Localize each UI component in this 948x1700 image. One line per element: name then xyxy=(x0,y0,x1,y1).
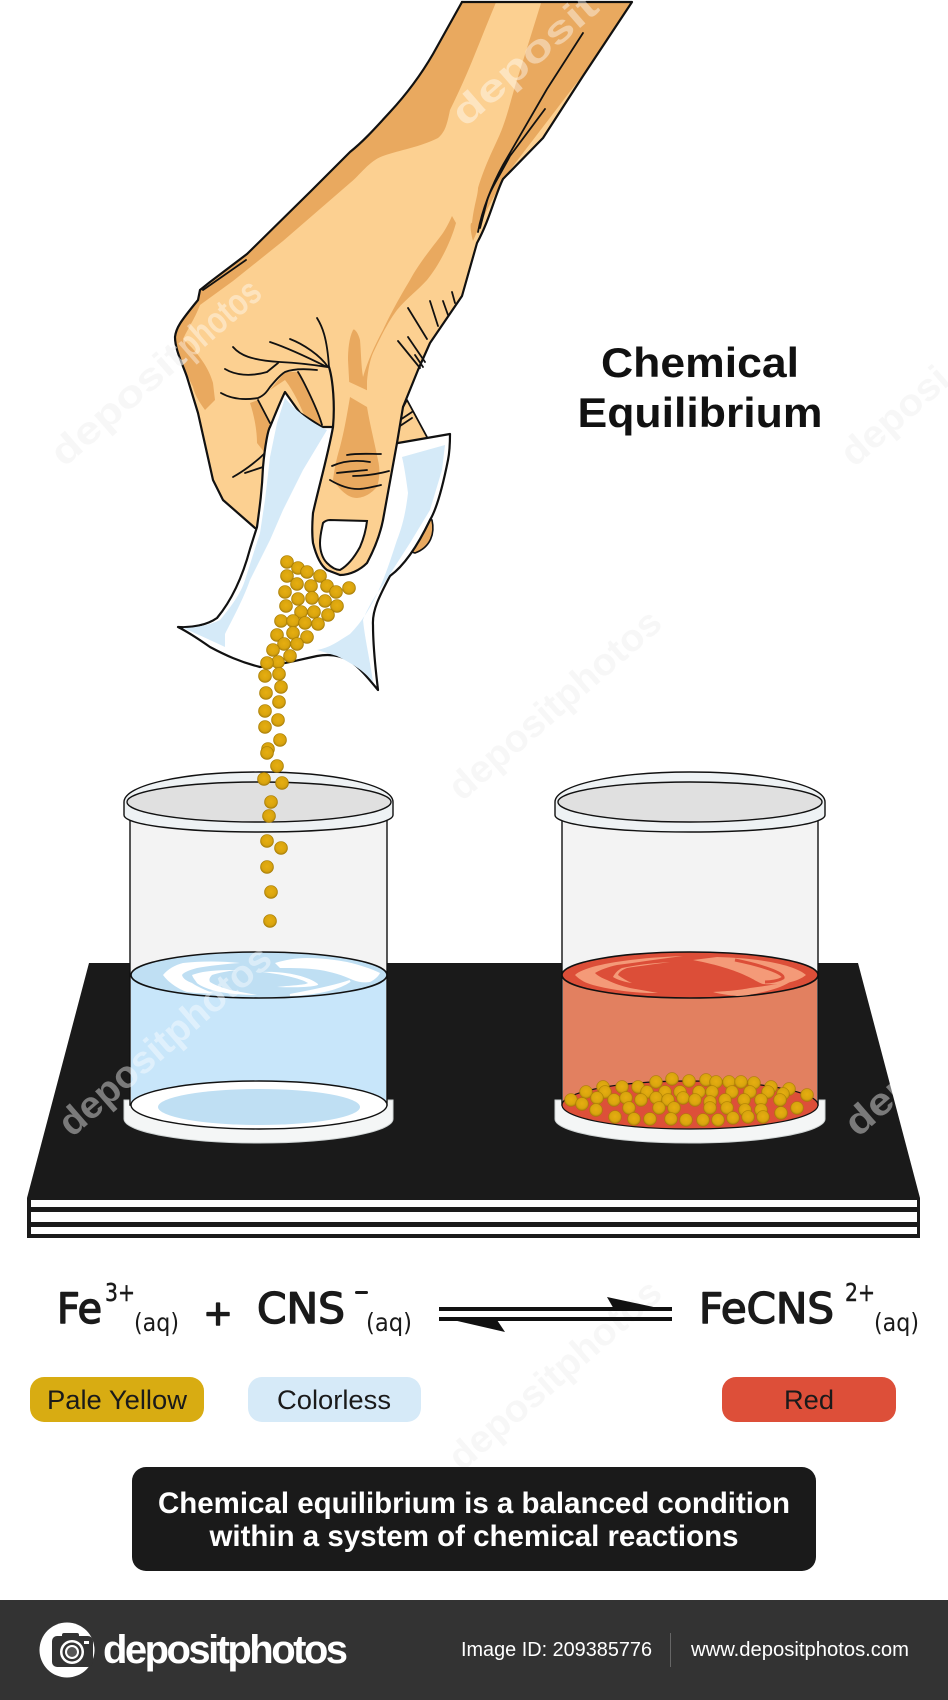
skin creases xyxy=(203,33,583,477)
base plate xyxy=(124,1100,393,1143)
thumb creases xyxy=(330,454,389,489)
solution surface xyxy=(131,952,387,998)
bottom ellipse xyxy=(131,1081,387,1129)
hand shading xyxy=(176,3,630,452)
hand and arm xyxy=(175,2,632,560)
image id: Image ID: 209385776 xyxy=(461,1639,652,1661)
label: colorless xyxy=(248,1377,421,1422)
title xyxy=(578,339,822,436)
beaker mouth xyxy=(127,782,391,822)
glass body xyxy=(562,802,818,1105)
photo watermarks: deposit xyxy=(443,0,607,135)
surface highlight stripe xyxy=(735,960,783,982)
hand outline right xyxy=(403,2,632,407)
definition callout xyxy=(132,1467,816,1571)
black laboratory board xyxy=(27,963,920,1238)
product FeCNS: (aq) xyxy=(874,1308,919,1337)
photo watermarks: depositphotos xyxy=(50,937,280,1145)
reactant CNS xyxy=(257,1284,412,1337)
website: www.depositphotos.com xyxy=(690,1639,909,1661)
paper sachet xyxy=(178,392,450,690)
photo watermarks: depos xyxy=(836,1028,948,1145)
paper blue shading right xyxy=(317,445,445,682)
definition callout: within a system of chemical reactions xyxy=(209,1520,738,1553)
hand holding paper xyxy=(165,0,640,756)
beaker mouth xyxy=(558,782,822,822)
poured beads on paper and falling xyxy=(258,556,356,756)
thumb xyxy=(312,380,403,575)
label: pale yellow xyxy=(30,1377,204,1422)
icon: camera logo xyxy=(40,1622,94,1678)
product FeCNS: FeCNS xyxy=(699,1284,834,1333)
photo watermarks: photos xyxy=(168,271,270,367)
rim xyxy=(124,772,393,832)
product FeCNS xyxy=(699,1278,919,1337)
label: colorless: Colorless xyxy=(277,1385,391,1415)
reactant Fe: (aq) xyxy=(134,1308,179,1337)
right beaker with red solution xyxy=(555,772,825,1143)
label: red xyxy=(722,1377,896,1422)
surface highlights xyxy=(163,958,380,995)
hand outline left xyxy=(175,2,462,528)
left beaker with colorless solution xyxy=(124,772,393,1143)
falling beads over left beaker xyxy=(258,746,288,928)
photo watermarks: depositphotos xyxy=(440,1271,670,1479)
footer bar xyxy=(0,1600,948,1700)
logo wordmark: depositphotos xyxy=(103,1628,348,1672)
plus sign: + xyxy=(203,1294,233,1334)
title: Equilibrium xyxy=(578,389,822,436)
definition callout: Chemical equilibrium is a balanced condition xyxy=(158,1487,790,1520)
reactant Fe xyxy=(57,1278,179,1337)
bottom pool xyxy=(158,1089,360,1125)
glass body xyxy=(130,802,387,1105)
solution body xyxy=(563,975,817,1105)
title: Chemical xyxy=(601,339,799,386)
photo watermarks: deposit xyxy=(42,335,195,475)
label: red: Red xyxy=(784,1385,834,1415)
thumbnail xyxy=(320,520,367,570)
rear finger xyxy=(396,400,428,446)
photo watermarks: depositphotos xyxy=(440,601,670,809)
reactant CNS: CNS xyxy=(257,1284,345,1333)
label: pale yellow: Pale Yellow xyxy=(47,1385,187,1415)
reactant Fe: Fe xyxy=(57,1284,102,1333)
product FeCNS: 2+ xyxy=(845,1278,875,1307)
chemical equation xyxy=(57,1278,919,1337)
settled beads xyxy=(564,1072,814,1126)
solution body xyxy=(131,975,386,1105)
base plate xyxy=(555,1100,825,1143)
solution surface xyxy=(562,952,818,998)
equilibrium arrows xyxy=(439,1297,672,1332)
rim xyxy=(555,772,825,832)
paper blue shading left xyxy=(183,398,327,647)
thumb outline xyxy=(312,367,403,575)
surface highlights xyxy=(575,956,806,996)
bottom ellipse xyxy=(562,1081,818,1129)
reactant Fe: 3+ xyxy=(105,1278,135,1307)
reactant CNS: (aq) xyxy=(366,1308,412,1337)
thumb shading xyxy=(333,397,379,498)
lower finger tip xyxy=(405,518,433,553)
